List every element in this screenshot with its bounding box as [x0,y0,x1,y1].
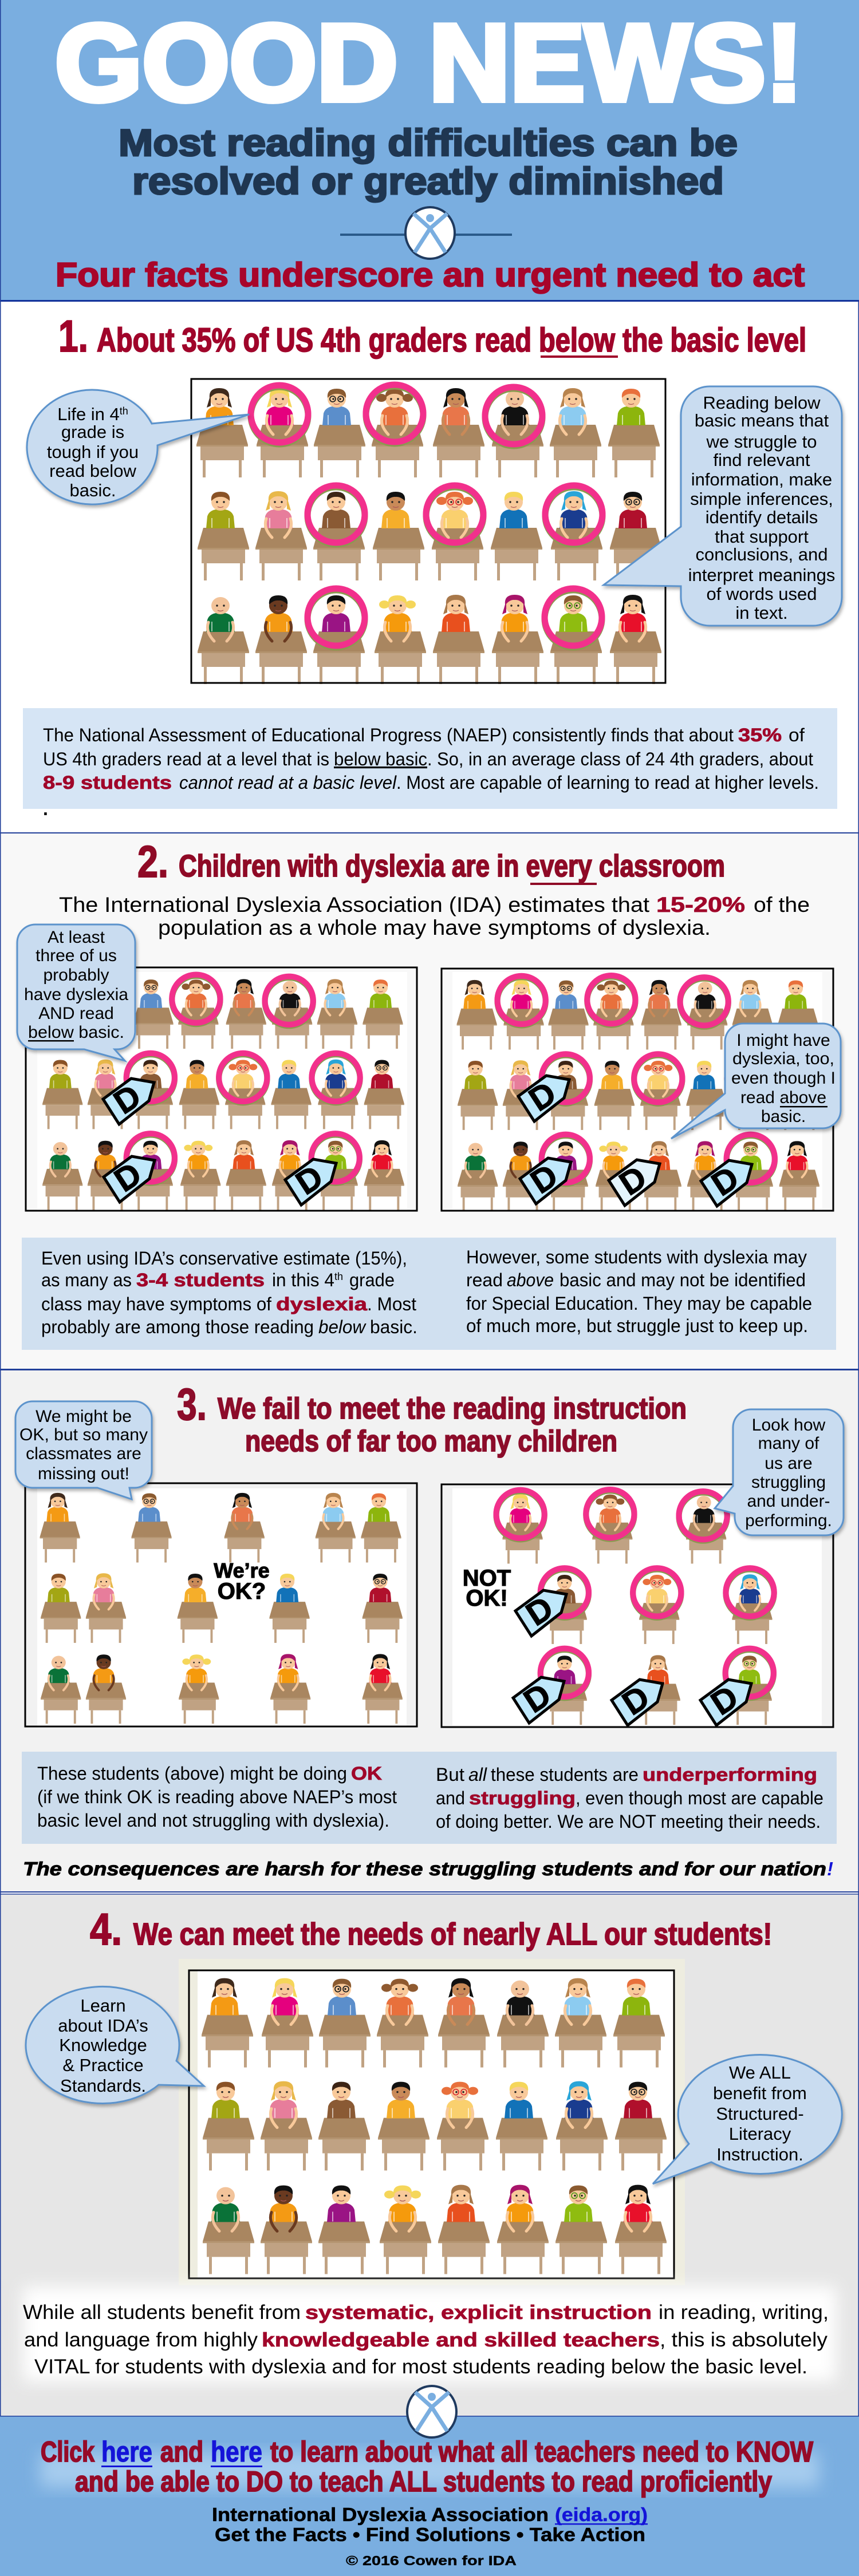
callout: reading below basic: of words used [707,584,817,604]
panel: footer [40,2386,819,2568]
label: NOT OK! [463,1566,511,1611]
panel: fact 2 [17,836,841,1350]
text block: conservative estimate and above basic: basic and may not be identified [559,1270,806,1290]
text block: conservative estimate and above basic: th [334,1271,343,1282]
callout: reading below basic: identify details [706,507,818,527]
subtitle [119,121,738,202]
callout: learn about IDA standards: Knowledge [59,2035,147,2055]
panel: fact 1 [23,311,842,819]
callout: we all benefit: Literacy [729,2124,791,2144]
organization credit: Get the Facts • Find Solutions • Take Action [215,2524,645,2545]
heading: fact 2: Children with dyslexia are in every classroom [179,849,725,883]
callout: reading below basic: basic means that [695,410,829,430]
text block: conservative estimate and above basic: as many as [41,1270,132,1290]
heading: fact 3: We fail to meet the reading instruction [218,1392,687,1425]
call to action: Click [41,2436,94,2468]
icon: D tag: D [704,1678,745,1722]
callout: reading below basic: find relevant [714,450,810,470]
heading: fact 4 [90,1904,772,1954]
text block: systematic explicit instruction: VITAL for students with dyslexia and for most students reading below the basic level. [34,2356,807,2378]
text block: IDA estimate [59,893,810,939]
callout: look how many: many of [758,1434,819,1453]
callout: life in 4th grade: basic. [70,480,116,500]
organization credit: © 2016 Cowen for IDA [346,2553,517,2568]
text block: conservative estimate and above basic [22,1238,836,1350]
icon: D tag: D [107,1077,148,1121]
header [55,2,805,294]
text block: conservative estimate and above basic: of much more, but struggle just to keep up. [466,1315,808,1336]
glow band [40,2453,819,2487]
callout: look how many: struggling [751,1473,826,1492]
label: NOT OK!: NOT [463,1566,511,1591]
text block: OK vs underperforming: (if we think OK is reading above NAEP’s most [37,1787,397,1807]
icon: D tag: D [524,1157,565,1201]
callout: at least three of us: have dyslexia [24,985,128,1004]
text block: NAEP: cannot read at a basic level [179,772,397,793]
callout: look how many [715,1409,844,1535]
callout: at least three of us: AND read [38,1004,114,1023]
callout: reading below basic: we struggle to [706,432,817,452]
text block: OK vs underperforming: and [436,1788,465,1808]
text block: IDA estimate: 15-20% [656,893,745,916]
organization credit [212,2504,648,2568]
callout: reading below basic: that support [715,527,809,547]
subtitle: resolved or greatly diminished [132,160,724,202]
text block: systematic explicit instruction: systematic, explicit instruction [305,2302,652,2324]
callout: at least three of us: probably [43,966,109,985]
icon: logo with divider [340,207,512,259]
callout: life in 4th grade: read below [49,461,136,481]
heading: fact 3: 3. [177,1379,207,1429]
text block: OK vs underperforming: of doing better. We are NOT meeting their needs. [436,1811,821,1832]
callout: reading below basic: in text. [735,603,788,623]
callout: life in 4th grade: Life in 4 [57,404,120,424]
callout: reading below basic: simple inferences, [690,489,833,509]
callout: life in 4th grade: th [120,405,128,417]
text block: conservative estimate and above basic: read [466,1270,503,1290]
callout: we all benefit [653,2055,842,2184]
text block: NAEP: 8-9 students [43,772,172,793]
label: We're OK?: We’re [214,1559,270,1582]
text block: NAEP: 35% [738,725,782,745]
classroom left with dyslexia tags [26,967,417,1211]
callout: I might have dyslexia too: I might have [736,1031,830,1050]
callout: life in 4th grade [27,390,249,504]
text block: conservative estimate and above basic: for Special Education. They may be capable [466,1293,812,1314]
text block: conservative estimate and above basic: Even using IDA’s conservative estimate (15%), [41,1248,407,1269]
callout: learn about IDA standards [26,1986,204,2103]
text block: conservative estimate and above basic: probably are among those reading [41,1317,314,1337]
callout: I might have dyslexia too: read above [740,1088,826,1107]
text block: NAEP: . [43,799,48,819]
label: NOT OK!: OK! [466,1586,508,1611]
callout: look how many: performing. [745,1511,832,1530]
callout: I might have dyslexia too: basic. [761,1107,806,1126]
text block: conservative estimate and above basic: dyslexia [276,1294,367,1314]
text block: NAEP: The National Assessment of Educational Progress (NAEP) consistently finds that about [43,725,734,745]
callout: I might have dyslexia too: dyslexia, too, [732,1049,834,1068]
text block: NAEP [23,708,837,819]
callout: we all benefit: benefit from [713,2083,807,2103]
classroom right with dyslexia tags [442,969,833,1211]
callout: we all benefit: We ALL [729,2063,791,2083]
text block: conservative estimate and above basic: basic. [370,1317,417,1337]
text block: systematic explicit instruction: and language from highly [24,2329,258,2351]
callout: at least three of us [17,924,135,1061]
callout: at least three of us: three of us [36,946,117,965]
callout: we might be OK: OK, but so many [19,1425,148,1444]
organization credit: (eida.org) [555,2504,648,2525]
text block: OK vs underperforming: OK [351,1763,382,1784]
callout: we might be OK: classmates are [26,1444,141,1463]
heading: fact 2 [137,836,725,887]
text block: OK vs underperforming: , even though most are capable [576,1788,823,1808]
callout: look how many: us are [765,1454,813,1473]
text block: OK vs underperforming: these students are [491,1764,639,1785]
text block: IDA estimate: population as a whole may have symptoms of dyslexia. [158,916,711,939]
text block: conservative estimate and above basic: However, some students with dyslexia may [466,1247,807,1267]
text block: OK vs underperforming [22,1752,837,1844]
callout: look how many: Look how [752,1416,826,1435]
heading: fact 1: 1. [58,311,88,361]
organization credit: International Dyslexia Association [212,2504,549,2525]
callout: reading below basic: Reading below [703,393,821,413]
callout: I might have dyslexia too: even though I [731,1069,836,1088]
callout: at least three of us: below basic. [28,1023,124,1042]
text block: OK vs underperforming: But [436,1764,464,1785]
icon: D tag: D [108,1155,148,1199]
text block: consequences: The consequences are harsh for these struggling students and for our nation [23,1858,826,1879]
text block: OK vs underperforming: underperforming [643,1764,817,1785]
callout: at least three of us: At least [48,928,105,947]
callout: reading below basic: conclusions, and [696,544,828,564]
callout: we might be OK [15,1401,152,1499]
text block: systematic explicit instruction: While all students benefit from [23,2301,301,2324]
text block: IDA estimate: of the [754,893,810,916]
callout: reading below basic: interpret meanings [688,565,835,585]
heading: fact 4: 4. [90,1904,122,1954]
text block: conservative estimate and above basic: grade [349,1270,395,1290]
icon: D tag: D [517,1676,558,1720]
tagline: Four facts underscore an urgent need to act [56,256,805,294]
call to action: here [101,2436,152,2468]
callout: reading below basic [604,386,842,626]
callout: life in 4th grade: grade is [61,422,124,442]
text block: conservative estimate and above basic: above [507,1270,554,1290]
callout: we might be OK: We might be [36,1407,132,1426]
classroom: students struggling [442,1484,833,1727]
text block: NAEP: . So, in an average class of 24 4th graders, about [427,749,813,769]
text block: OK vs underperforming: all [468,1764,487,1785]
text block: conservative estimate and above basic: class may have symptoms of [41,1294,271,1314]
heading: fact 2: 2. [137,836,168,887]
subtitle: Most reading difficulties can be [119,121,738,164]
text block: consequences: ! [827,1858,833,1879]
text block: OK vs underperforming: struggling [469,1788,576,1808]
heading: fact 3 [177,1379,687,1458]
classroom of 24 students with 8 circled [191,379,665,684]
title: GOOD NEWS! [55,2,803,124]
text block: NAEP: below basic [334,749,427,769]
label: We're OK? [214,1559,270,1604]
icon: logo [407,2386,456,2437]
text block: systematic explicit instruction: in reading, writing, [659,2301,829,2324]
label: We're OK?: OK? [218,1579,266,1604]
text block: systematic explicit instruction: knowledgeable and skilled teachers [262,2329,660,2351]
callout: I might have dyslexia too [671,1024,841,1139]
icon: D tag: D [705,1159,746,1203]
text block: conservative estimate and above basic: . Most [367,1294,416,1314]
call to action [41,2436,814,2498]
text block: conservative estimate and above basic: in this 4 [272,1270,334,1290]
callout: we might be OK: missing out! [38,1464,129,1483]
text block: NAEP: of [789,725,805,745]
callout: look how many: and under- [747,1492,830,1511]
callout: life in 4th grade: tough if you [47,442,139,462]
text block: NAEP: US 4th graders read at a level that is [43,749,329,769]
callout: we all benefit: Structured- [716,2104,804,2124]
call to action: here [211,2436,262,2468]
classroom: all students [179,1959,685,2285]
icon: D tag: D [613,1159,653,1203]
panel: fact 3 [15,1379,844,1879]
text block: OK vs underperforming: These students (above) might be doing [37,1763,347,1784]
heading: fact 3: needs of far too many children [245,1425,617,1458]
callout: learn about IDA standards: about IDA’s [58,2016,148,2036]
icon: D tag: D [522,1074,563,1119]
icon: D tag: D [616,1678,656,1722]
text block: systematic explicit instruction: , this is absolutely [660,2329,828,2351]
panel: fact 4 [23,1904,842,2381]
call to action: and [160,2436,203,2468]
callout: learn about IDA standards: Standards. [60,2076,146,2096]
text block: NAEP: . Most are capable of learning to read at higher levels. [396,772,819,793]
callout: we all benefit: Instruction. [716,2144,803,2164]
icon: D tag: D [519,1589,560,1633]
text block: conservative estimate and above basic: 3-4 students [136,1270,265,1290]
text block: conservative estimate and above basic: below [318,1317,367,1337]
text block: IDA estimate: The International Dyslexia Association (IDA) estimates that [59,893,650,916]
callout: learn about IDA standards: Learn [80,1996,126,2016]
callout: reading below basic: information, make [691,469,832,489]
callout: learn about IDA standards: & Practice [62,2055,144,2075]
classroom: students doing OK [25,1483,417,1726]
text block: systematic explicit instruction [23,2287,836,2381]
heading: fact 1 [58,311,806,361]
text block: OK vs underperforming: basic level and not struggling with dyslexia). [37,1810,389,1831]
icon: D tag: D [289,1158,330,1202]
